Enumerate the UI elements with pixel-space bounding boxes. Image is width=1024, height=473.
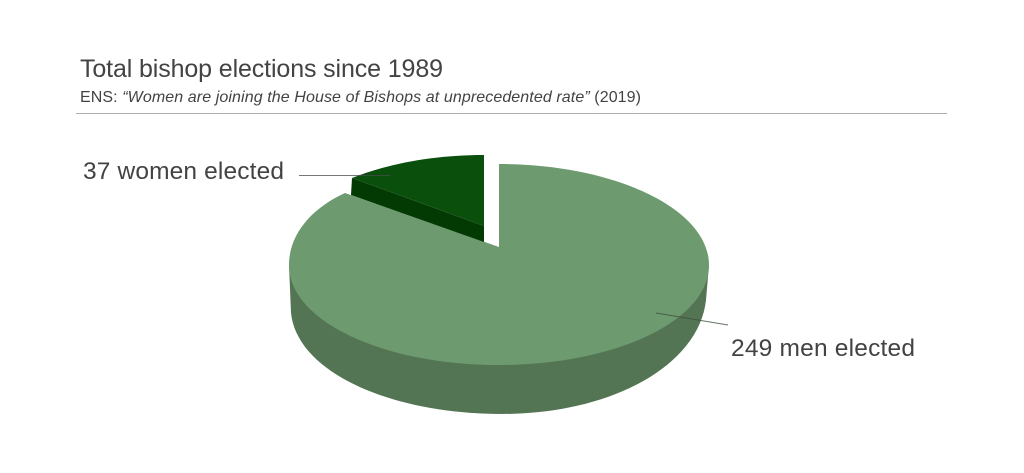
pie chart xyxy=(289,155,709,414)
subtitle: source citation: ENS: “Women are joining the House of Bishops at unprecedented rate” (2019) xyxy=(80,89,641,106)
slice: men elected top face xyxy=(289,164,709,365)
title: Total bishop elections since 1989 xyxy=(80,55,443,83)
slice: men elected side wall xyxy=(289,265,709,414)
label: women: 37 women elected xyxy=(83,158,284,185)
callout: 249 men elected xyxy=(656,313,915,362)
slice: women elected top face xyxy=(352,155,484,226)
slice: women elected side wall xyxy=(351,178,484,242)
label: men: 249 men elected xyxy=(731,335,915,362)
